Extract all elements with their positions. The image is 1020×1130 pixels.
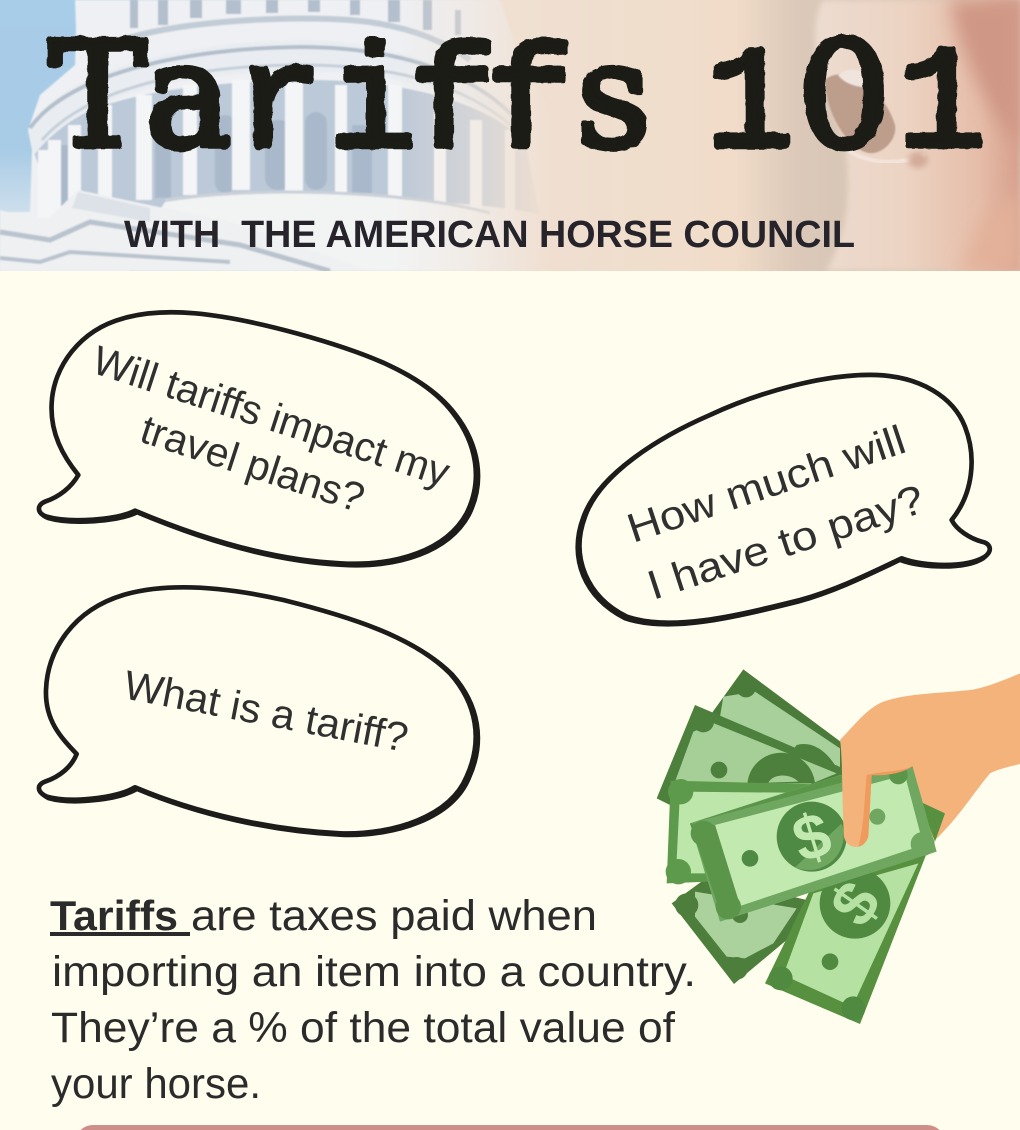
title: riff — [236, 24, 574, 190]
speech bubble: what is a tariff — [39, 587, 478, 835]
definition text: are taxes paid when — [191, 892, 597, 940]
speech bubble: how much — [578, 375, 990, 624]
speech bubble: travel plans — [39, 312, 478, 565]
shadow bays — [34, 80, 527, 210]
drum base — [162, 192, 415, 208]
definition text: your horse. — [51, 1060, 261, 1108]
speech bubble: what is a tariff: What is a tariff? — [120, 662, 412, 761]
title: Ta — [49, 11, 232, 181]
illustration: hand holding cash — [657, 669, 1020, 1024]
bill edge behind hand — [920, 802, 945, 842]
definition text: Tariffs — [50, 892, 178, 939]
photo: sky — [0, 0, 130, 271]
speech bubble: how much: How much will — [621, 416, 911, 552]
hand: fingers over bill — [840, 673, 1020, 847]
bill: bottom right: $ — [817, 869, 895, 938]
columns — [38, 80, 515, 220]
definition text: importing an item into a country. — [52, 948, 696, 996]
photo: right fade of capitol — [418, 0, 549, 271]
definition text: They’re a % of the total value of — [51, 1004, 676, 1052]
bill: bottom left — [672, 877, 807, 984]
definition text — [50, 892, 696, 1108]
foreground wing — [0, 190, 160, 226]
title: 1 — [706, 24, 794, 190]
bill: left middle — [666, 779, 843, 884]
photo: capitol dome — [0, 0, 570, 271]
speech bubble: how much: I have to pay? — [642, 476, 930, 609]
header photo banner — [0, 0, 1020, 271]
bill: back top — [712, 669, 845, 773]
hand: palm behind bill — [893, 693, 1020, 840]
subtitle: WITH THE AMERICAN HORSE COUNCIL — [124, 214, 855, 256]
next panel top edge — [75, 1125, 945, 1130]
bill: front: $ — [785, 799, 839, 876]
upper drum — [130, 0, 461, 35]
title: s — [576, 11, 651, 181]
bill: front — [690, 763, 937, 922]
entablature — [33, 114, 82, 154]
speech bubble: travel plans: Will tariffs impact my — [87, 337, 456, 496]
title: 1 — [898, 24, 986, 190]
bill: bottom right — [765, 853, 927, 1024]
speech bubble: travel plans: travel plans? — [135, 406, 370, 521]
photo: horse face — [815, 0, 1020, 271]
title: 0 — [798, 11, 891, 181]
bill: second — [657, 705, 843, 807]
